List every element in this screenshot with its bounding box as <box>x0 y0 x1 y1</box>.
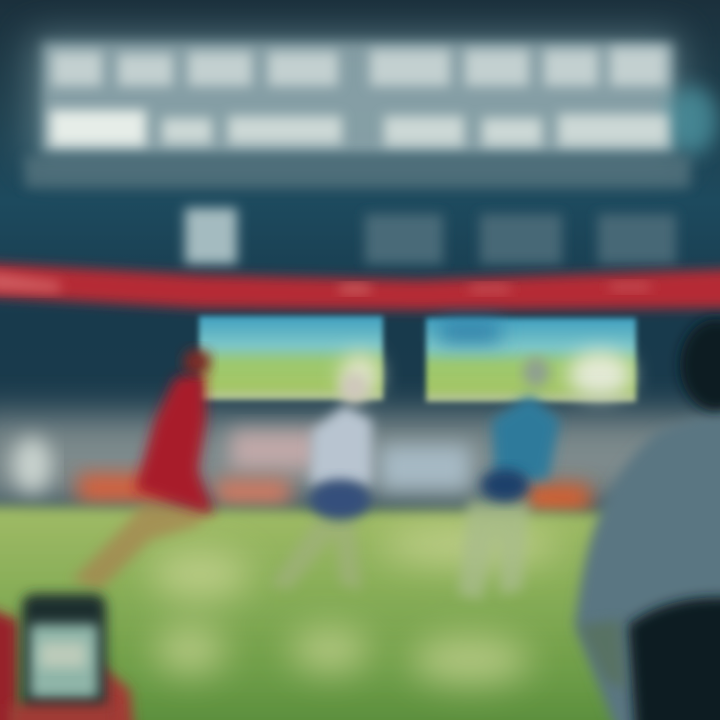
player in white <box>270 373 372 590</box>
lower headline band <box>25 156 690 188</box>
player in blue <box>458 357 560 600</box>
crowd stands <box>0 415 720 505</box>
background: dark stadium sky <box>0 0 720 530</box>
left video screen <box>199 316 383 400</box>
player in red <box>72 349 214 590</box>
scoreboard column panels <box>185 208 676 264</box>
orange advertising boards <box>78 474 590 512</box>
hand holding a phone at lower left <box>0 594 135 720</box>
red banner <box>0 263 720 310</box>
spectator in the foreground right <box>575 319 720 720</box>
screen highlights <box>340 322 632 399</box>
pitch light patches <box>150 525 560 684</box>
headline: blurred second row <box>50 110 668 146</box>
headline glow panel <box>30 35 718 165</box>
right video screen <box>426 318 636 402</box>
headline: blurred first row <box>52 48 666 86</box>
grass pitch <box>0 506 720 720</box>
